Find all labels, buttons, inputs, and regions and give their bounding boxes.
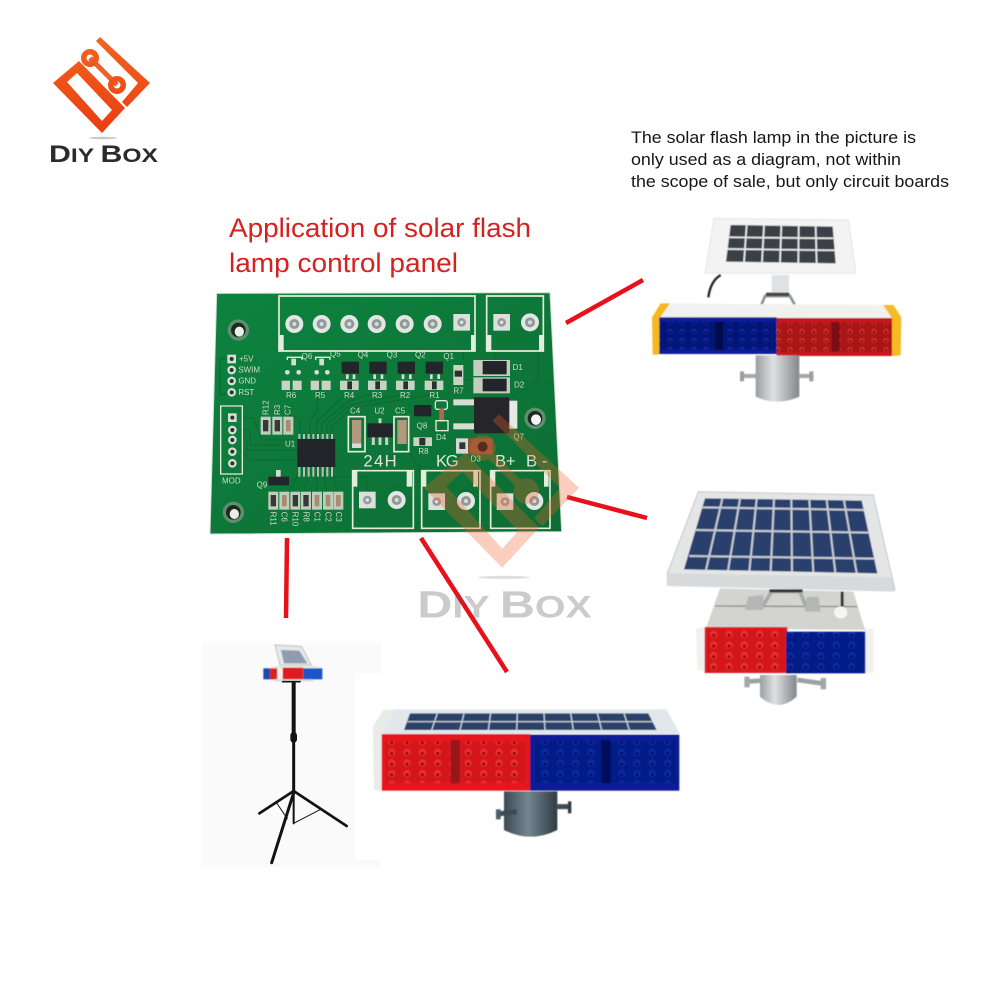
transistor Q9: [268, 470, 289, 485]
board silkscreen labels: MOD: [222, 476, 241, 485]
board silkscreen labels: C5: [395, 406, 406, 415]
terminal labels: KG: [436, 452, 459, 471]
lamp: right with large panel: [667, 492, 895, 705]
watermark mark: [424, 414, 579, 568]
note about the lamp picture: [631, 128, 949, 191]
board silkscreen labels: R2: [400, 391, 411, 400]
board silkscreen labels: D1: [513, 363, 523, 372]
note about the lamp picture: the scope of sale, but only circuit boards: [631, 172, 949, 191]
board silkscreen labels: C7: [284, 404, 293, 415]
board silkscreen labels: GND: [238, 377, 256, 386]
terminal labels: B+: [495, 452, 516, 471]
terminal labels: [363, 452, 547, 471]
regulator U2 with C4 and C5: [348, 417, 409, 452]
resistors R1-R6: [282, 365, 463, 390]
board silkscreen labels: RST: [238, 388, 254, 397]
board: [210, 293, 562, 534]
board silkscreen labels: R1: [429, 391, 440, 400]
logo mark: [53, 37, 150, 133]
board silkscreen labels: Q4: [358, 351, 369, 360]
board silkscreen labels: Q3: [387, 351, 398, 360]
board silkscreen labels: Q6: [302, 352, 313, 361]
board silkscreen labels: +5V: [239, 355, 254, 364]
solar panel: [667, 492, 895, 592]
silkscreen frames: [221, 296, 550, 528]
header pads: [227, 355, 237, 468]
tripod stand: [259, 682, 347, 863]
board silkscreen labels: Q9: [257, 480, 268, 489]
logo: DIY Box: [49, 37, 158, 168]
board silkscreen labels: Q2: [415, 351, 426, 360]
bracket and sensor: [745, 589, 847, 618]
board silkscreen labels: C3: [334, 512, 343, 522]
board silkscreen labels: C4: [350, 406, 361, 415]
red connector lines: [286, 280, 647, 672]
watermark: DIY Box: [417, 414, 592, 626]
board silkscreen labels: R12: [261, 400, 270, 415]
solar panel: [705, 218, 856, 273]
bottom resistor row: [268, 492, 343, 510]
Q8, D4, R8, D3: [413, 401, 493, 454]
note about the lamp picture: only used as a diagram, not within: [631, 150, 901, 169]
resistors R12, R3, C7: [261, 417, 293, 435]
board silkscreen labels: R8: [418, 447, 429, 456]
board silkscreen labels: C2: [323, 512, 332, 522]
board silkscreen labels: Q1: [443, 352, 455, 361]
lamp front: [382, 734, 679, 791]
tripod lamp head: [263, 645, 322, 681]
board silkscreen labels: C1: [312, 512, 321, 522]
board silkscreen labels: R7: [453, 386, 464, 395]
board silkscreen labels: R11: [269, 512, 278, 526]
IC U1: [297, 434, 335, 477]
board silkscreen labels: C6: [280, 512, 289, 522]
mounting holes: [223, 319, 546, 523]
board silkscreen labels: Q8: [417, 421, 428, 430]
title: Application of solar flash: [229, 213, 531, 243]
board silkscreen labels: R5: [315, 391, 326, 400]
mounting pole: [744, 675, 826, 705]
board silkscreen labels: R3: [372, 391, 383, 400]
lamp: bottom centre: [373, 709, 680, 837]
board silkscreen labels: U1: [285, 440, 296, 449]
board silkscreen labels: D3: [471, 455, 481, 464]
lamp body: [652, 303, 901, 356]
title: [229, 213, 531, 278]
PCB control panel: [210, 293, 562, 534]
bracket and cable: [708, 275, 805, 309]
board silkscreen labels: SWIM: [238, 366, 260, 375]
watermark wordmark: D IY B OX: [417, 583, 592, 626]
lamp body: [696, 588, 873, 673]
tripod lamp photo: [202, 643, 382, 867]
board silkscreen labels: [222, 350, 525, 527]
MOSFET Q7: [453, 397, 517, 433]
board silkscreen labels: R4: [344, 391, 355, 400]
terminal labels: 24H: [363, 452, 397, 471]
lamp top with solar cells: [373, 709, 680, 791]
terminal pads: [285, 313, 543, 510]
logo wordmark: DIY BOX: [49, 141, 158, 168]
title: lamp control panel: [229, 248, 458, 278]
board silkscreen labels: R10: [291, 512, 300, 527]
board silkscreen labels: Q7: [513, 432, 525, 441]
diodes D1 and D2: [473, 360, 510, 393]
board silkscreen labels: Q5: [330, 350, 341, 359]
copper traces: [220, 350, 538, 493]
board silkscreen labels: R3: [273, 404, 282, 415]
board silkscreen labels: R6: [286, 391, 297, 400]
board silkscreen labels: D2: [514, 380, 525, 389]
transistors Q1-Q6: [285, 357, 443, 379]
mounting pole: [740, 355, 813, 402]
mounting pole: [496, 791, 571, 837]
board silkscreen labels: R8: [301, 512, 310, 522]
lamp: top right with small panel: [652, 218, 901, 402]
board silkscreen labels: U2: [374, 406, 385, 415]
board silkscreen labels: D4: [436, 433, 447, 442]
note about the lamp picture: The solar flash lamp in the picture is: [631, 128, 916, 147]
terminal labels: B-: [526, 452, 547, 471]
photo background: [202, 643, 382, 867]
